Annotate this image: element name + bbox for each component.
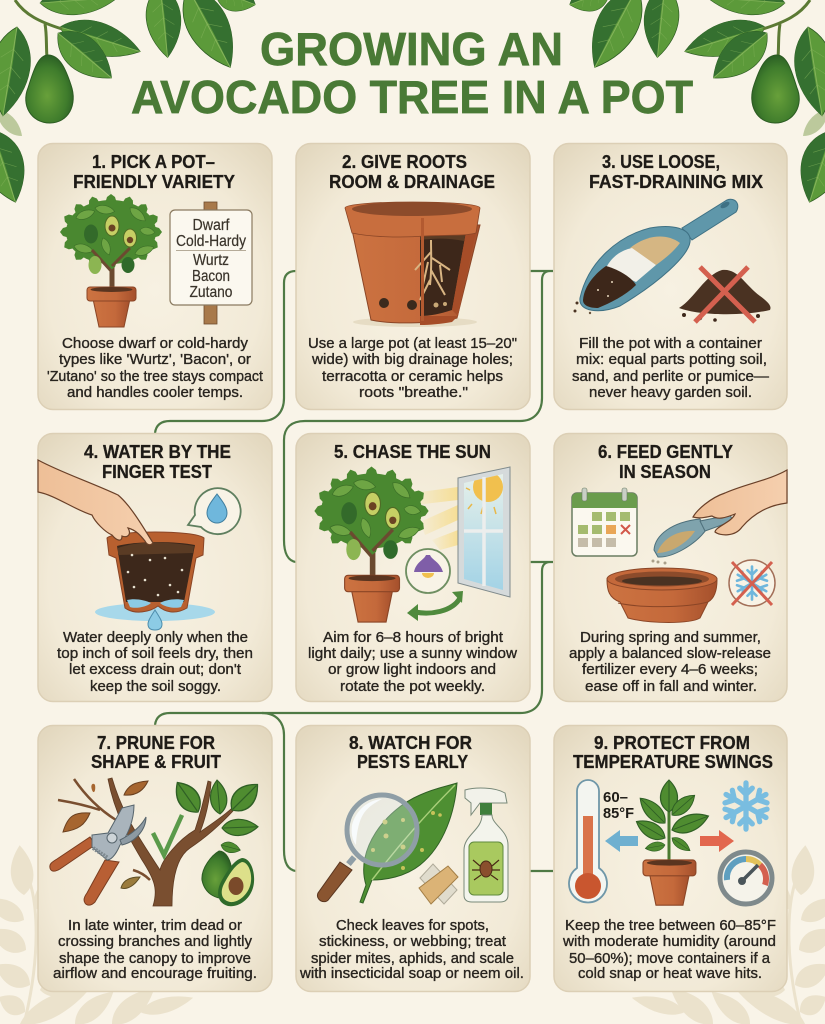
text: step 3: never heavy garden soil. xyxy=(589,384,752,401)
heading: step 6: 6. FEED GENTLY xyxy=(598,441,734,462)
heading: step 1: FRIENDLY VARIETY xyxy=(73,171,236,192)
text: step 2: roots "breathe." xyxy=(359,384,468,401)
title: GROWING AN xyxy=(260,23,563,75)
heading: step 1 xyxy=(73,151,236,192)
text: step 1: and handles cooler temps. xyxy=(67,384,243,401)
text: step 7: shape the canopy to improve xyxy=(59,950,251,967)
icon: spray bottle with pest label xyxy=(464,788,508,902)
heading: step 8 xyxy=(349,732,472,772)
heading: step 7: SHAPE & FRUIT xyxy=(91,751,222,772)
icon: sunbeams through window xyxy=(415,467,510,597)
text: step 9 xyxy=(562,917,776,982)
text: step 6: During spring and summer, xyxy=(580,629,761,646)
text: step 3 xyxy=(572,335,769,401)
heading: step 8: 8. WATCH FOR xyxy=(349,732,472,753)
panel: step 7 xyxy=(38,726,272,992)
heading: step 4: FINGER TEST xyxy=(102,461,213,482)
text: temperature range: 60– xyxy=(603,789,628,806)
icon: adhesive bandage xyxy=(419,864,458,904)
icon: potted seedling xyxy=(633,780,711,905)
heading: step 3 xyxy=(589,151,764,192)
arrow: hot red xyxy=(700,830,734,852)
text: step 4: keep the soil soggy. xyxy=(90,678,221,695)
text: step 3: sand, and perlite or pumice— xyxy=(572,368,769,385)
text: step 2: wide) with big drainage holes; xyxy=(311,351,513,368)
heading: step 4 xyxy=(84,441,231,482)
text: step 4: let excess drain out; don't xyxy=(69,661,242,678)
text: step 8 xyxy=(299,917,524,982)
panel: step 5 xyxy=(296,434,530,702)
icon: no feeding in winter xyxy=(729,560,775,606)
icon: pruning shears xyxy=(50,805,146,905)
heading: step 3: 3. USE LOOSE, xyxy=(602,151,720,172)
text: step 8: Check leaves for spots, xyxy=(336,917,489,934)
icon: calendar xyxy=(572,488,637,556)
text: step 6: fertilizer every 4–6 weeks; xyxy=(582,661,758,678)
text: step 1: Choose dwarf or cold-hardy xyxy=(62,335,248,352)
icon: green check arrow xyxy=(153,815,182,855)
text: step 4 xyxy=(57,629,253,695)
heading: step 6 xyxy=(598,441,734,482)
panel: step 9 xyxy=(554,726,787,992)
icon: variety sign: Cold-Hardy xyxy=(176,233,246,250)
text: step 1 xyxy=(47,335,264,401)
faint leaves bottom left xyxy=(0,844,195,1024)
title xyxy=(131,23,693,123)
top right foliage with avocado xyxy=(565,0,825,209)
text: step 5: or grow light indoors and xyxy=(328,661,496,678)
icon: garden soil crossed out xyxy=(679,267,771,322)
icon: avocado whole and halved xyxy=(202,840,254,906)
text: step 5 xyxy=(308,629,517,695)
heading: step 1: 1. PICK A POT– xyxy=(92,151,215,172)
arrow: rotate the pot xyxy=(407,591,463,621)
panel: step 1 xyxy=(38,144,272,410)
text: step 4: top inch of soil feels dry, then xyxy=(57,645,253,662)
heading: step 5: 5. CHASE THE SUN xyxy=(334,441,491,462)
faint leaves bottom right xyxy=(630,844,825,1024)
text: step 2: Use a large pot (at least 15–20" xyxy=(308,335,517,352)
text: step 9: with moderate humidity (around xyxy=(562,933,776,950)
icon: wide pot with soil xyxy=(607,568,717,622)
text: step 1: 'Zutano' so the tree stays compact xyxy=(47,368,264,385)
heading: step 4: 4. WATER BY THE xyxy=(84,441,231,462)
heading: step 2: ROOM & DRAINAGE xyxy=(329,171,495,192)
top left foliage with avocado xyxy=(0,0,260,209)
text: step 6 xyxy=(569,629,771,695)
text: step 5: Aim for 6–8 hours of bright xyxy=(323,629,504,646)
icon: branches with leaves xyxy=(58,777,265,906)
text: step 1: types like 'Wurtz', 'Bacon', or xyxy=(59,351,251,368)
icon: potted avocado tree xyxy=(60,194,162,327)
heading: step 6: IN SEASON xyxy=(619,461,711,482)
heading: step 2 xyxy=(329,151,495,192)
text: step 8: with insecticidal soap or neem oil. xyxy=(299,965,524,982)
text: step 6: ease off in fall and winter. xyxy=(585,678,757,695)
text: step 7: In late winter, trim dead or xyxy=(68,917,242,934)
icon: variety sign: Dwarf xyxy=(192,217,230,234)
text: step 8: spider mites, aphids, and scale xyxy=(311,950,514,967)
icon: hand testing soil in pot xyxy=(38,460,215,630)
heading: step 7 xyxy=(91,732,222,772)
text: step 8: stickiness, or webbing; treat xyxy=(319,933,507,950)
text: step 9: 50–60%); move containers if a xyxy=(569,950,771,967)
panel: step 3 xyxy=(554,144,787,410)
text: step 9: Keep the tree between 60–85°F xyxy=(565,917,776,934)
icon: cutaway terracotta pot with roots xyxy=(345,202,480,327)
text: step 3: Fill the pot with a container xyxy=(579,335,762,352)
icon: snowflake xyxy=(725,783,767,829)
text: step 9: cold snap or heat wave hits. xyxy=(578,965,762,982)
text: step 5: light daily; use a sunny window xyxy=(308,645,517,662)
icon: hand pouring fertilizer from scoop xyxy=(652,470,787,571)
icon: thermometer xyxy=(569,780,607,902)
heading: step 9: 9. PROTECT FROM xyxy=(594,732,750,753)
icon: water drop speech bubble xyxy=(188,488,241,534)
text: step 7: airflow and encourage fruiting. xyxy=(53,965,257,982)
icon: spotted leaf xyxy=(360,783,457,903)
heading: step 8: PESTS EARLY xyxy=(357,751,469,772)
icon: potted avocado tree in sun xyxy=(314,466,429,622)
text: step 6: apply a balanced slow-release xyxy=(569,645,771,662)
icon: humidity gauge xyxy=(720,852,772,904)
icon: variety sign: Wurtz xyxy=(193,252,229,269)
title: AVOCADO TREE IN A POT xyxy=(131,71,693,123)
connector lines between steps xyxy=(155,271,553,871)
text: step 7 xyxy=(53,917,257,982)
text: step 3: mix: equal parts potting soil, xyxy=(576,351,767,368)
heading: step 9 xyxy=(573,732,773,772)
text: step 2: terracotta or ceramic helps xyxy=(322,368,503,385)
icon: variety sign: Bacon xyxy=(192,268,230,285)
panel: step 6 xyxy=(554,434,787,702)
text: step 7: crossing branches and lightly xyxy=(58,933,252,950)
text: temperature range: 85°F xyxy=(603,805,634,822)
heading: step 7: 7. PRUNE FOR xyxy=(97,732,215,753)
panel: step 4 xyxy=(38,434,272,702)
panel: step 8 xyxy=(296,726,530,992)
heading: step 9: TEMPERATURE SWINGS xyxy=(573,751,773,772)
heading: step 2: 2. GIVE ROOTS xyxy=(342,151,467,172)
panel: step 2 xyxy=(296,144,530,410)
text: step 4: Water deeply only when the xyxy=(63,629,248,646)
text: temperature range xyxy=(603,789,634,822)
arrow: cold blue xyxy=(605,830,638,852)
text: step 5: rotate the pot weekly. xyxy=(340,678,485,695)
icon: variety sign xyxy=(170,202,252,324)
icon: variety sign: Zutano xyxy=(190,284,232,301)
text: step 2 xyxy=(308,335,517,401)
icon: scoop of potting mix xyxy=(574,199,738,314)
icon: magnifying glass xyxy=(317,795,417,902)
heading: step 3: FAST-DRAINING MIX xyxy=(589,171,764,192)
icon: grow light xyxy=(406,549,450,593)
